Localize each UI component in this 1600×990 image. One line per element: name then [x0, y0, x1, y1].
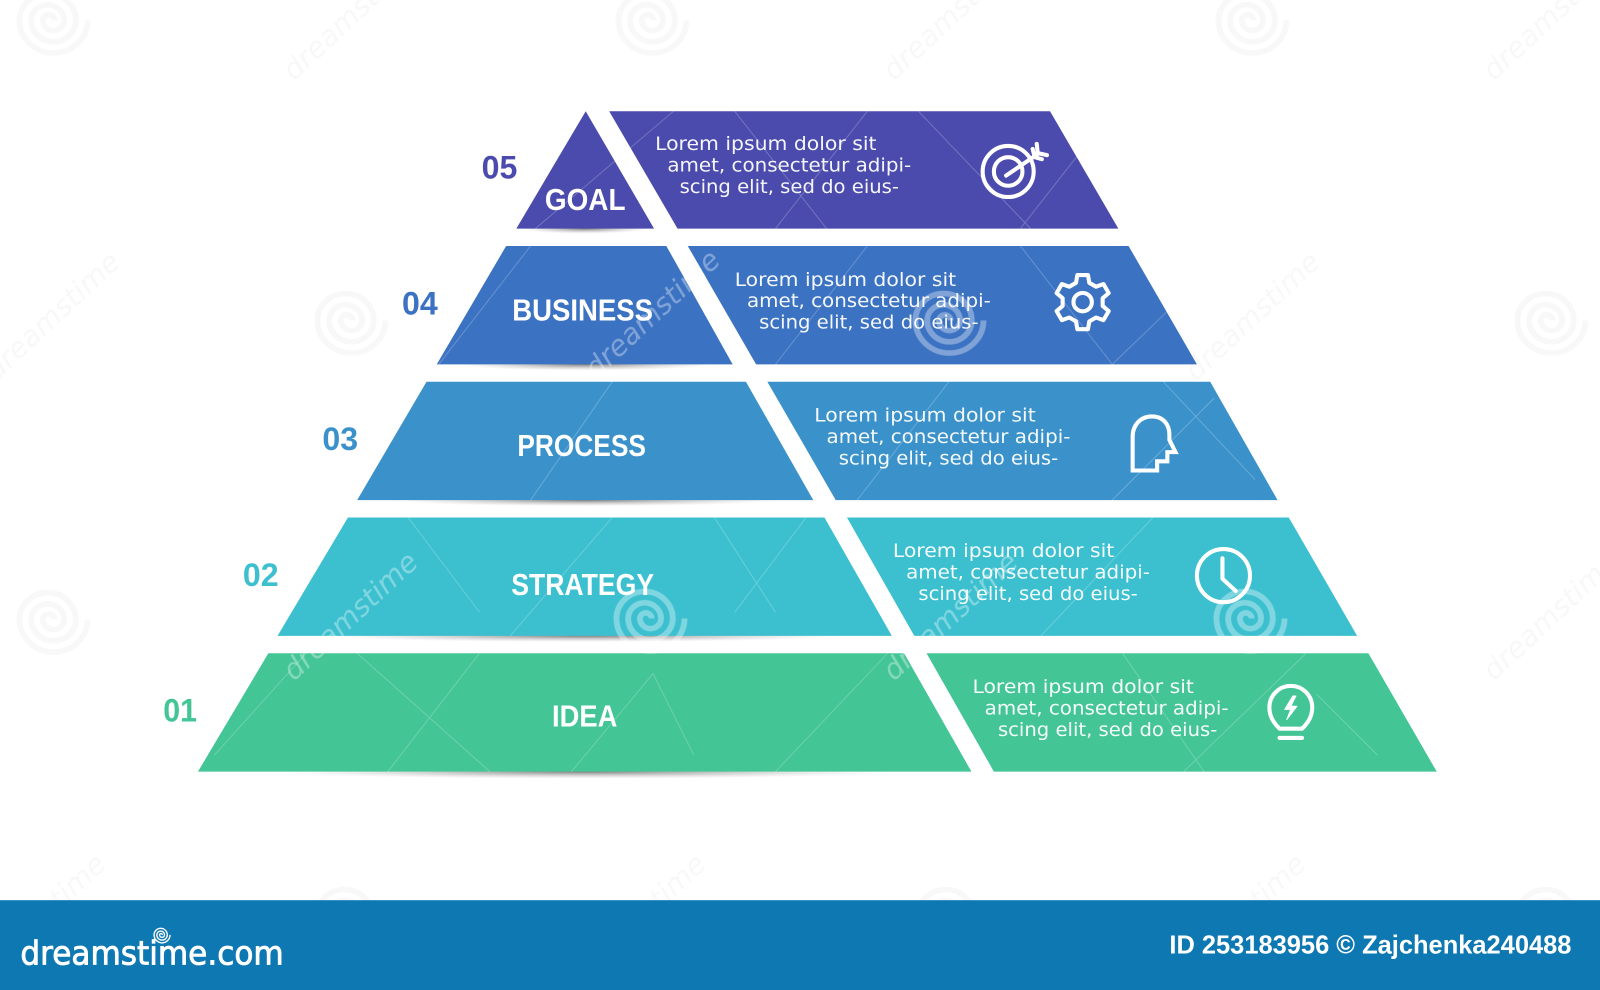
heading: business: BUSINESS [512, 293, 653, 327]
text block: idea: amet, consectetur adipi- [985, 698, 1229, 719]
text block: idea: scing elit, sed do eius- [998, 720, 1217, 741]
background watermark: dreamstime [1163, 847, 1312, 989]
text block: strategy: amet, consectetur adipi- [906, 563, 1150, 584]
left block: strategy [278, 517, 892, 636]
foreground watermark [214, 111, 1378, 772]
background watermark: dreamstime [1178, 245, 1327, 387]
text block: idea [972, 677, 1229, 741]
text block: process: scing elit, sed do eius- [839, 448, 1058, 469]
right block: process [767, 382, 1278, 500]
foreground watermark: dreamstime [275, 545, 425, 687]
text block: business: amet, consectetur adipi- [747, 291, 991, 312]
icon: target [983, 144, 1047, 197]
logo spiral [154, 928, 170, 943]
icon: head [1133, 416, 1176, 471]
icon: light bulb [1269, 686, 1312, 738]
shadows under left blocks [279, 224, 891, 779]
panel: tier 05 goal [482, 111, 1118, 229]
left block: business [437, 246, 733, 364]
text block: business: scing elit, sed do eius- [759, 313, 979, 334]
left block: idea [198, 653, 971, 772]
icon: gear [1057, 275, 1109, 329]
footer banner [0, 900, 1600, 990]
text block: goal [655, 134, 911, 198]
text block: strategy: Lorem ipsum dolor sit [893, 541, 1114, 562]
text block: strategy: scing elit, sed do eius- [918, 584, 1138, 605]
foreground watermark: dreamstime [875, 545, 1025, 687]
panel: tier 02 strategy [243, 517, 1357, 636]
logo: dreamstime.com: dreamstime.com [20, 934, 284, 972]
left block: process [357, 382, 813, 500]
panel: tier 04 business [402, 246, 1197, 364]
number 01: 01 [163, 692, 197, 729]
text block: process: Lorem ipsum dolor sit [814, 406, 1036, 427]
number 05: 05 [482, 149, 517, 186]
text block: goal: Lorem ipsum dolor sit [655, 134, 877, 155]
icon: clock [1197, 549, 1250, 602]
right block: goal [609, 111, 1118, 229]
number 02: 02 [243, 556, 279, 593]
text block: idea: Lorem ipsum dolor sit [972, 677, 1194, 698]
text block: goal: amet, consectetur adipi- [667, 155, 911, 176]
right block: strategy [847, 517, 1357, 636]
panel: tier 03 process [322, 382, 1278, 500]
text block: business: Lorem ipsum dolor sit [735, 270, 956, 291]
credit line: ID 253183956 © Zajchenka240488 [1169, 931, 1571, 959]
background watermark: dreamstime [563, 847, 712, 989]
heading: process: PROCESS [517, 429, 646, 463]
number 03: 03 [322, 420, 358, 457]
left block: goal [516, 111, 654, 229]
heading: strategy: STRATEGY [511, 568, 654, 602]
text block: strategy [893, 541, 1150, 605]
text block: process: amet, consectetur adipi- [827, 427, 1070, 448]
heading: goal: GOAL [545, 183, 626, 217]
number 04: 04 [402, 284, 438, 321]
panel: tier 01 idea [163, 653, 1437, 772]
right block: business [688, 246, 1197, 364]
text block: process [814, 406, 1070, 469]
heading: idea: IDEA [552, 700, 617, 734]
text block: goal: scing elit, sed do eius- [680, 177, 899, 198]
text block: business [735, 270, 991, 334]
right block: idea [927, 653, 1437, 772]
foreground watermark: dreamstime [578, 242, 727, 385]
